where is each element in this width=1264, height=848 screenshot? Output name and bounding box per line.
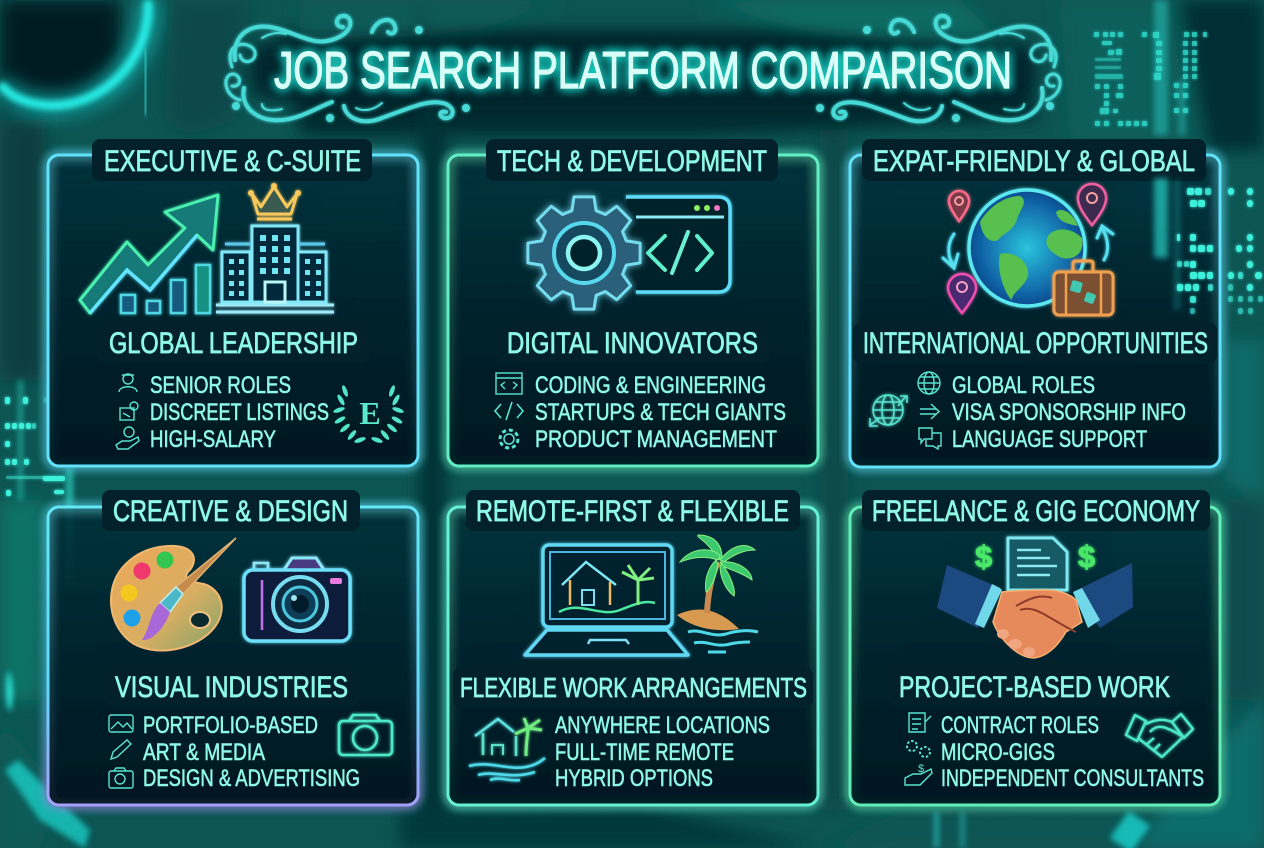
list: coding and engineering bbox=[496, 372, 766, 399]
icon: handshake with sleeves bbox=[937, 563, 1133, 658]
icon: outline camera bbox=[339, 715, 392, 755]
subheading tab: PROJECT-BASED WORK bbox=[899, 671, 1170, 704]
panel frame bbox=[448, 155, 818, 466]
icon: gear bbox=[528, 197, 640, 309]
decorative glow arc top-left bbox=[0, 0, 148, 115]
panel frame bbox=[850, 507, 1220, 805]
subheading tab bbox=[98, 323, 370, 363]
panel: creative and design bbox=[48, 490, 418, 805]
list: coding and engineering: CODING & ENGINEERING bbox=[535, 372, 766, 399]
decorative vertical light bars bbox=[18, 0, 1186, 590]
icon: office building with crown bbox=[216, 183, 334, 312]
panel frame bbox=[48, 507, 418, 805]
icon: contract document bbox=[1008, 538, 1067, 590]
list: design and advertising bbox=[109, 765, 360, 792]
list: global roles: GLOBAL ROLES bbox=[952, 372, 1095, 399]
list: independent consultants: $ bbox=[918, 763, 924, 775]
icon: growth arrow and bars bbox=[80, 195, 218, 313]
heading tab bbox=[862, 139, 1206, 181]
icon: laptop with home scene bbox=[525, 545, 688, 655]
panel: executive and c-suite bbox=[48, 139, 418, 466]
icon: location pins bbox=[948, 184, 1106, 313]
panel: tech and development bbox=[448, 139, 818, 466]
list: art and media: ART & MEDIA bbox=[143, 739, 265, 766]
subheading tab bbox=[453, 667, 813, 708]
list: micro-gigs: MICRO-GIGS bbox=[941, 739, 1055, 766]
heading tab: CREATIVE & DESIGN bbox=[113, 495, 348, 528]
heading tab bbox=[486, 139, 778, 181]
subheading tab bbox=[496, 323, 770, 363]
icon: suitcase bbox=[1054, 261, 1113, 315]
list: high-salary bbox=[116, 426, 276, 453]
subheading tab bbox=[853, 322, 1217, 364]
icon: laurel wreath emblem bbox=[333, 385, 404, 444]
list: discreet listings: DISCREET LISTINGS bbox=[150, 399, 329, 426]
list: startups and tech giants: STARTUPS & TECH GIANTS bbox=[535, 399, 786, 426]
list: portfolio-based bbox=[109, 712, 318, 739]
heading tab bbox=[466, 490, 800, 531]
panel: expat-friendly and global bbox=[850, 139, 1220, 467]
list: senior roles: SENIOR ROLES bbox=[150, 372, 291, 399]
list: hybrid options: HYBRID OPTIONS bbox=[555, 765, 713, 792]
icon: circular arrows bbox=[943, 226, 1113, 268]
icon: home beach bbox=[469, 718, 545, 780]
list: contract roles bbox=[909, 712, 1099, 739]
list: product management: PRODUCT MANAGEMENT bbox=[535, 426, 777, 453]
decorative light bars over right panel bbox=[1154, 178, 1180, 310]
decorative streak bottom-left bbox=[5, 670, 1150, 848]
list: micro-gigs bbox=[907, 739, 1055, 766]
heading tab: REMOTE-FIRST & FLEXIBLE bbox=[476, 495, 789, 528]
list: portfolio-based: PORTFOLIO-BASED bbox=[143, 712, 318, 739]
list: global roles bbox=[918, 372, 1095, 399]
icon: dollar sign right: $ bbox=[1078, 539, 1095, 574]
icon: code window bbox=[626, 197, 730, 292]
panel frame bbox=[48, 155, 418, 466]
list: full-time remote: FULL-TIME REMOTE bbox=[555, 739, 734, 766]
title text: JOB SEARCH PLATFORM COMPARISON bbox=[274, 42, 1012, 100]
panel: freelance and gig economy bbox=[850, 490, 1220, 805]
list: anywhere locations: ANYWHERE LOCATIONS bbox=[555, 712, 770, 739]
list: independent consultants bbox=[905, 763, 1204, 792]
icon: globe bbox=[969, 190, 1085, 306]
heading tab bbox=[102, 490, 360, 531]
subheading tab bbox=[104, 667, 359, 707]
heading tab bbox=[862, 490, 1210, 531]
list: language support bbox=[919, 426, 1147, 453]
list: art and media bbox=[111, 739, 265, 766]
icon: globe with arrows bbox=[870, 395, 907, 426]
list: high-salary: HIGH-SALARY bbox=[150, 426, 276, 453]
list: contract roles: CONTRACT ROLES bbox=[941, 712, 1099, 739]
list: discreet listings bbox=[120, 399, 329, 426]
subheading tab: FLEXIBLE WORK ARRANGEMENTS bbox=[460, 672, 807, 703]
panel frame bbox=[850, 155, 1220, 467]
icon: paint palette and brush bbox=[111, 538, 236, 651]
flourish right bbox=[818, 16, 1060, 121]
panel frame bbox=[448, 507, 818, 805]
digital dots top right bbox=[1094, 32, 1207, 126]
list: senior roles bbox=[119, 372, 291, 399]
icon: palm tree island bbox=[677, 535, 758, 652]
list: language support: LANGUAGE SUPPORT bbox=[952, 426, 1147, 453]
heading tab: EXECUTIVE & C-SUITE bbox=[104, 145, 361, 178]
panel: remote-first and flexible bbox=[448, 490, 818, 805]
subheading tab: DIGITAL INNOVATORS bbox=[507, 327, 758, 360]
icon: laurel wreath emblem: E bbox=[359, 395, 381, 431]
title banner bbox=[226, 16, 1060, 121]
heading tab bbox=[92, 139, 372, 181]
digital dots left edge bbox=[5, 397, 84, 496]
subheading tab bbox=[888, 666, 1182, 707]
list: visa sponsorship info: VISA SPONSORSHIP INFO bbox=[952, 399, 1186, 426]
heading tab: TECH & DEVELOPMENT bbox=[497, 145, 767, 178]
icon: dollar sign left: $ bbox=[975, 539, 992, 574]
flourish left bbox=[226, 16, 468, 121]
icon: outline handshake bbox=[1126, 714, 1193, 757]
list: design and advertising: DESIGN & ADVERTISING bbox=[143, 765, 360, 792]
icon: neon camera bbox=[244, 558, 350, 641]
digital dots right edge bbox=[1177, 188, 1263, 314]
subheading tab: VISUAL INDUSTRIES bbox=[115, 671, 348, 704]
subheading tab: GLOBAL LEADERSHIP bbox=[109, 327, 358, 360]
